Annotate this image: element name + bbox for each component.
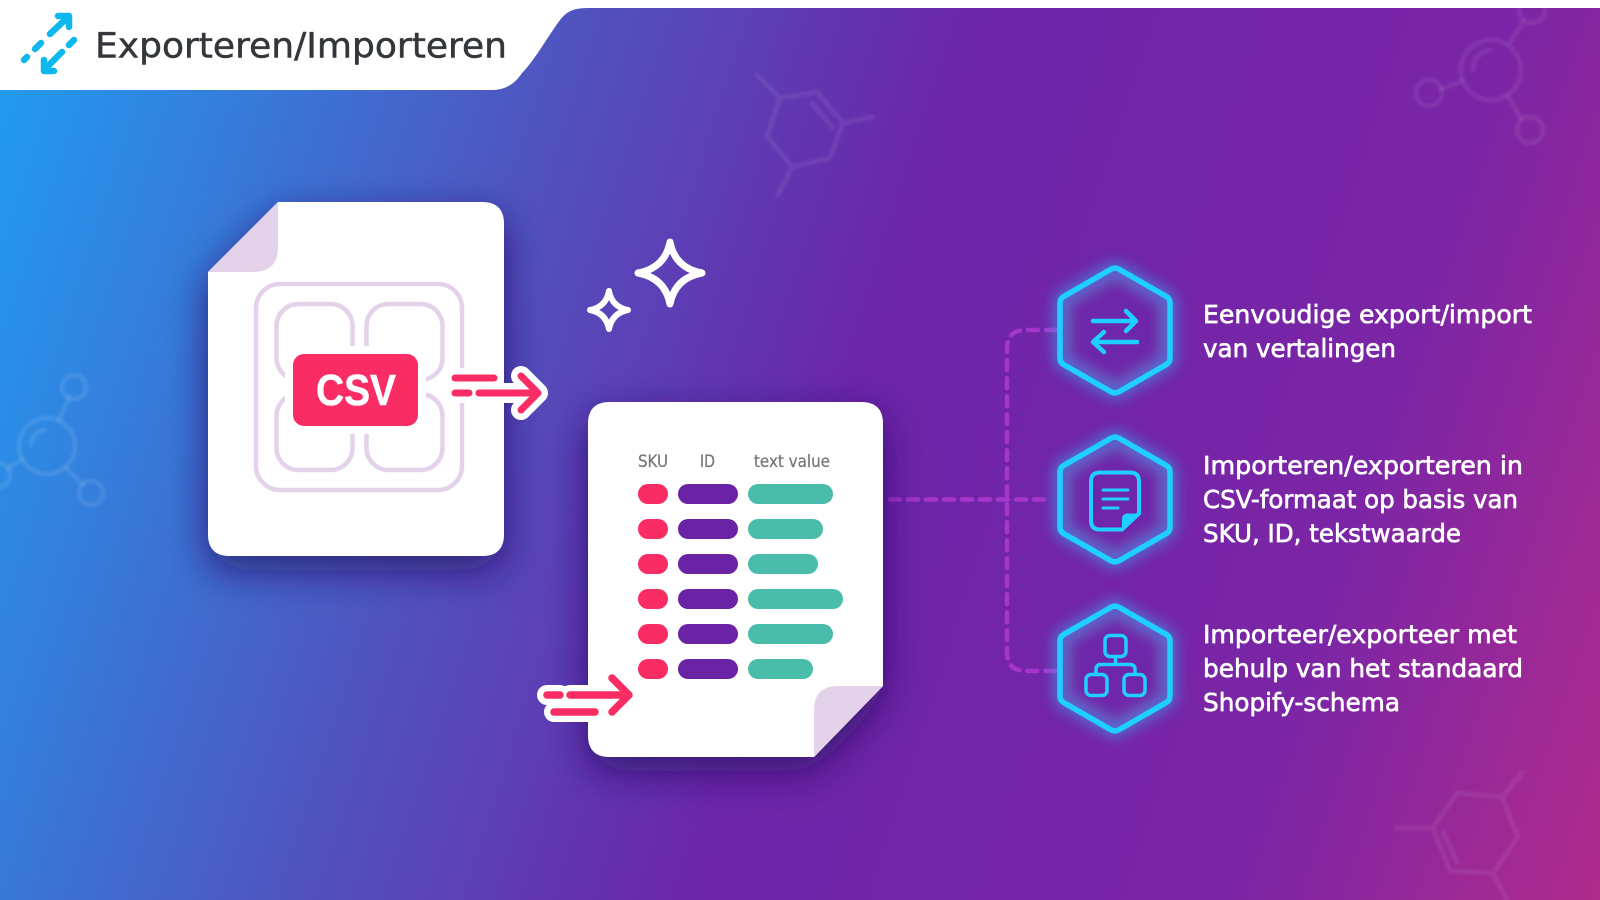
background hexagon: bottom right: [1397, 773, 1522, 900]
CSV grid outline: [256, 284, 462, 490]
text block: Shopify schema: [1203, 620, 1523, 717]
table rows: [638, 484, 843, 679]
column headers: SKU: [638, 452, 668, 471]
CSV badge: [293, 354, 418, 426]
header tab: [0, 0, 1600, 90]
CSV badge: CSV: [316, 366, 397, 415]
text block: CSV format: SKU, ID, tekstwaarde: [1203, 519, 1461, 548]
text block: CSV format: [1203, 451, 1523, 548]
column headers: ID: [700, 452, 715, 471]
hexagon icon: document: [1060, 437, 1170, 562]
document sheet: [588, 402, 883, 757]
background molecule: top right: [1416, 0, 1545, 143]
icon: swap arrows: [1093, 311, 1137, 352]
text block: CSV format: Importeren/exporteren in: [1203, 451, 1523, 480]
hexagon icon: schema: [1060, 606, 1170, 731]
arrow: into table document: [547, 678, 629, 712]
text block: easy export/import: Eenvoudige export/import: [1203, 300, 1532, 329]
folded corner: [208, 202, 278, 272]
arrow: out of CSV document: [455, 376, 538, 410]
column headers: [638, 452, 830, 471]
text block: Shopify schema: Importeer/exporteer met: [1203, 620, 1517, 649]
table document: [588, 402, 883, 757]
hexagon icon: export/import: [1060, 268, 1170, 393]
CSV source document: [208, 202, 504, 556]
text block: Shopify schema: behulp van het standaard: [1203, 654, 1523, 683]
folded corner: [814, 686, 883, 757]
text block: easy export/import: [1203, 300, 1532, 363]
text block: Shopify schema: Shopify-schema: [1203, 688, 1400, 717]
column headers: text value: [754, 452, 830, 471]
icon: file: [1091, 472, 1139, 530]
text block: easy export/import: van vertalingen: [1203, 334, 1396, 363]
background molecule: left: [0, 375, 103, 505]
icon: small sparkle: [590, 291, 628, 329]
title: Exporteren/Importeren: [95, 26, 507, 66]
icon: export import arrows: [24, 16, 74, 71]
icon: large sparkle: [638, 242, 702, 304]
text block: CSV format: CSV-formaat op basis van: [1203, 485, 1518, 514]
icon: org chart: [1086, 636, 1145, 696]
background hexagon: top centre: [757, 75, 873, 195]
dashed connector lines: [890, 330, 1056, 671]
document sheet: [208, 202, 504, 556]
